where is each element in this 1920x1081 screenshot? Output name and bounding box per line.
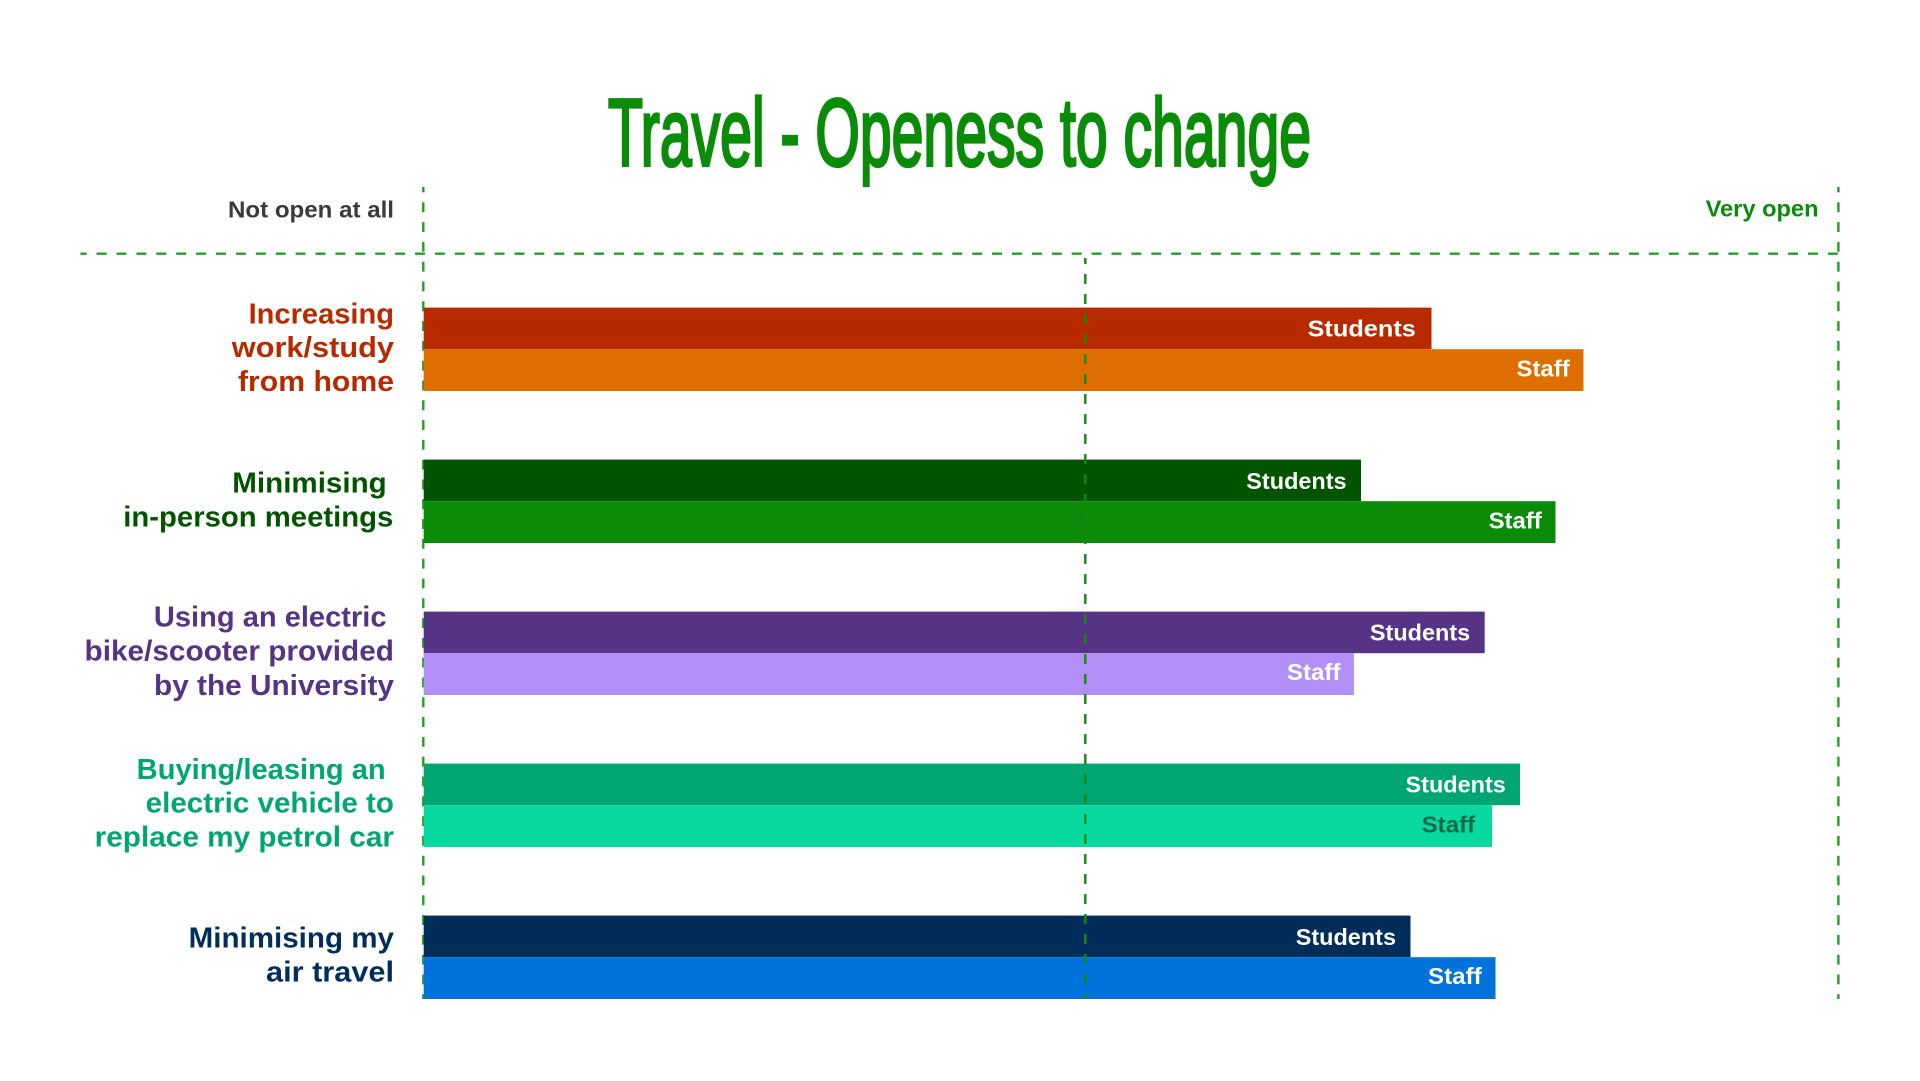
panel: electric bike/scooter provided by the University [84,602,1485,702]
students bar [424,612,1485,653]
category label [123,467,393,534]
staff bar [424,501,1556,543]
staff bar label: Staff [1489,508,1542,534]
students bar [424,916,1410,957]
category label: replace my petrol car [95,822,394,854]
panel: buying/leasing an electric vehicle [95,754,1520,854]
category label: work/study [231,332,394,364]
staff bar label: Staff [1287,659,1341,685]
title: Travel - Openess to change [608,80,1311,186]
axis: right scale line [1837,187,1840,999]
students bar [424,460,1361,501]
category label: Using an electric [154,602,386,634]
students bar [424,764,1520,805]
category label: Minimising my [189,923,394,955]
category label [231,298,394,398]
axis: horizontal header divider [80,252,1838,255]
category label: electric vehicle to [146,788,394,820]
students bar label: Students [1406,772,1506,798]
staff bar [424,957,1496,999]
panel: minimising my air travel [189,916,1496,999]
students bar label: Students [1370,620,1470,646]
scale label: not open at all: Not open at all [228,197,394,223]
category label: from home [238,366,394,398]
category label: by the University [154,670,394,702]
category label [95,754,394,854]
category label: bike/scooter provided [84,636,394,668]
scale label: very open: Very open [1706,196,1818,222]
staff bar label: Staff [1422,811,1475,837]
students bar [424,308,1432,349]
axis: midpoint line [1084,258,1087,999]
students bar label: Students [1296,924,1396,950]
staff bar label: Staff [1516,356,1570,382]
staff bar label: Staff [1428,963,1482,989]
axis: left scale line [422,187,424,999]
staff bar [424,653,1354,695]
category label [84,602,394,702]
category label: Increasing [249,298,394,330]
category label: air travel [266,957,394,989]
category label: Buying/leasing an [137,754,386,786]
students bar label: Students [1246,468,1347,494]
staff bar [424,805,1492,847]
panel: minimising in-person meetings [123,460,1555,543]
students bar label: Students [1308,316,1416,342]
panel: increasing work/study from home [231,298,1584,398]
category label: in-person meetings [123,502,393,534]
category label: Minimising [232,467,387,499]
category label [189,923,394,989]
staff bar [424,349,1584,391]
